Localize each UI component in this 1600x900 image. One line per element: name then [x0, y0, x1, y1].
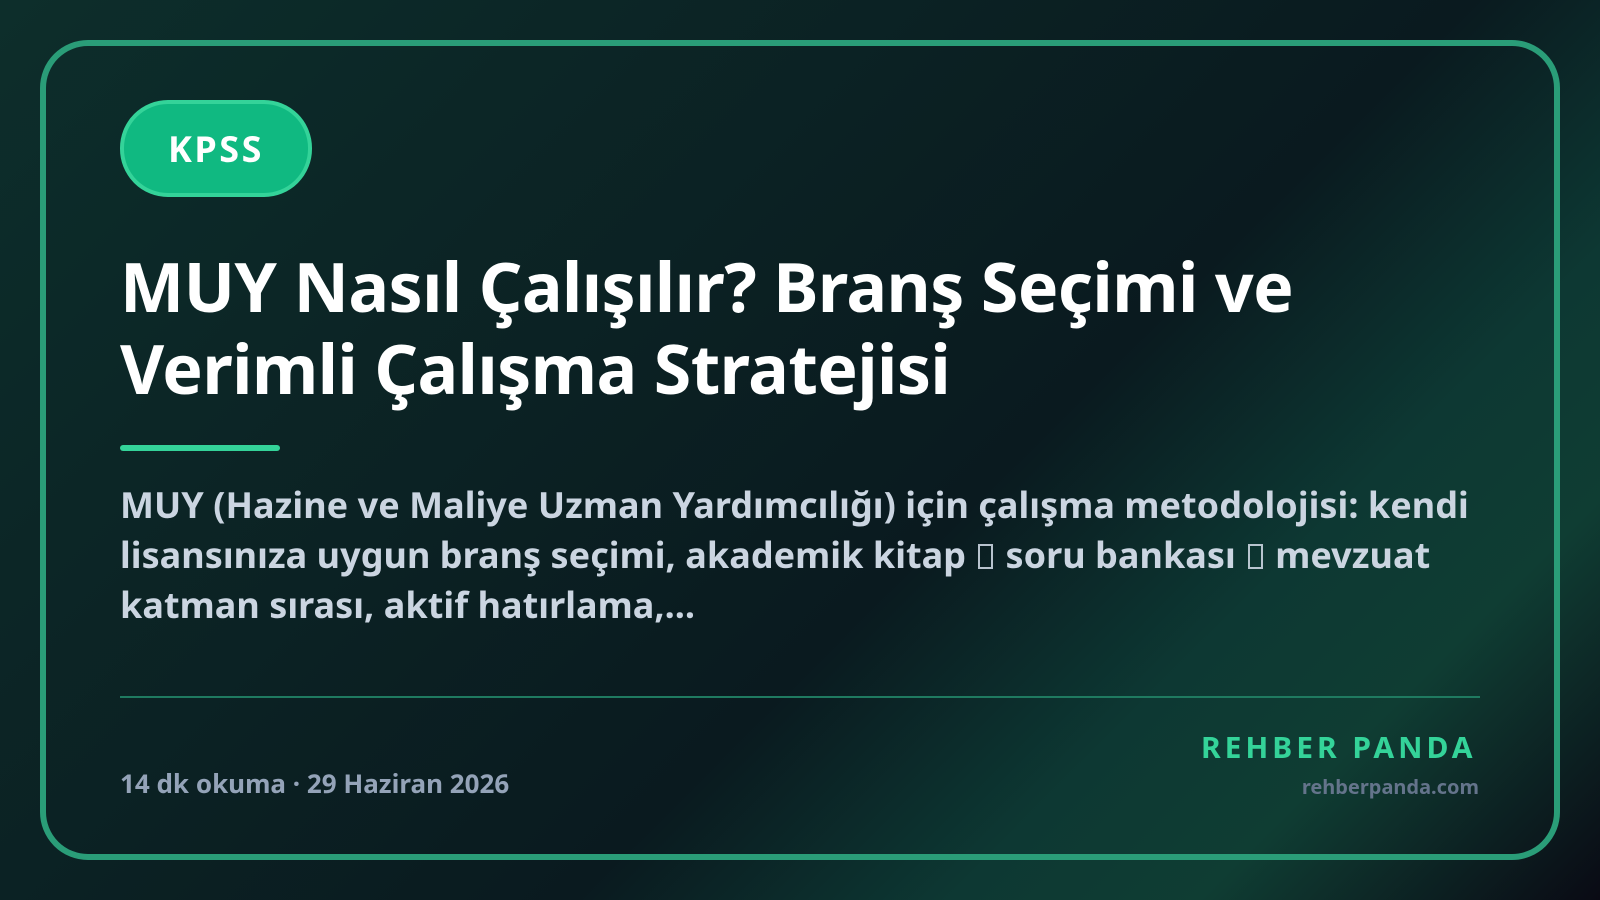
accent bar — [120, 445, 280, 451]
description: lisansınıza uygun branş seçimi, akademik kitap soru bankası mevzuat — [120, 530, 1430, 579]
description: katman sırası, aktif hatırlama,... — [120, 580, 695, 629]
description: MUY (Hazine ve Maliye Uzman Yardımcılığı) için çalışma metodolojisi: kendi — [120, 480, 1469, 529]
reading time and date: 14 dk okuma · 29 Haziran 2026 — [120, 765, 509, 801]
description — [120, 480, 1469, 629]
title — [120, 239, 1293, 414]
website: rehberpanda.com — [1302, 773, 1479, 800]
category badge — [120, 100, 312, 197]
title: MUY Nasıl Çalışılır? Branş Seçimi ve — [120, 239, 1293, 332]
category badge: KPSS — [168, 124, 264, 173]
title: Verimli Çalışma Stratejisi — [120, 321, 950, 414]
divider — [120, 696, 1480, 698]
brand name: REHBER PANDA — [1201, 726, 1476, 767]
